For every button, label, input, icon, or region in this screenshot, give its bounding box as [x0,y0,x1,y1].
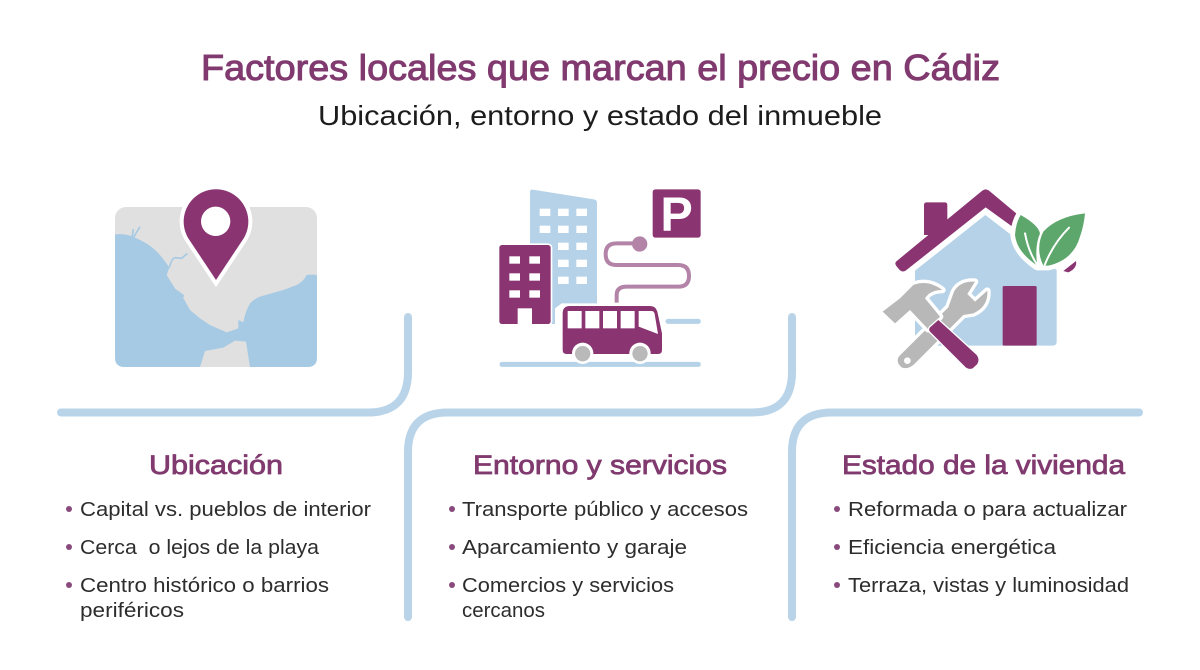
list: estado de la vivienda: Terraza, vistas y luminosidad [848,575,1129,597]
connector line: ubicación [61,317,408,412]
list: ubicación: Centro histórico o barrios [80,575,329,597]
list: entorno y servicios: Transporte público y accesos [462,499,748,521]
icon: city, parking and bus: P [660,188,693,242]
list: ubicación: periféricos [80,600,184,622]
list: entorno y servicios: cercanos [462,600,545,622]
list: entorno y servicios [449,499,748,622]
subtitle: Ubicación, entorno y estado del inmueble [318,100,882,131]
list: ubicación: Capital vs. pueblos de interior [80,499,371,521]
icon: city, parking and bus [499,188,701,364]
list: estado de la vivienda: Eficiencia energética [848,537,1057,559]
panel: estado de la vivienda [834,450,1129,597]
heading: estado de la vivienda: Estado de la vivienda [842,450,1126,480]
list: estado de la vivienda: Reformada o para actualizar [848,499,1127,521]
connector line: entorno [408,317,792,617]
connector line: estado [792,412,1139,617]
panel: ubicación [66,450,371,622]
list: ubicación [66,499,371,622]
icon: house with leaves and tools [883,189,1085,369]
list: estado de la vivienda [834,499,1129,597]
title: Factores locales que marcan el precio en Cádiz [201,47,1000,88]
panel: entorno y servicios [449,450,748,622]
list: entorno y servicios: Aparcamiento y garaje [462,537,687,559]
icon: map with location pin [115,189,317,367]
heading: entorno y servicios: Entorno y servicios [473,450,727,480]
heading: ubicación: Ubicación [149,450,283,480]
list: entorno y servicios: Comercios y servicios [462,575,674,597]
list: ubicación: Cerca o lejos de la playa [80,537,320,559]
